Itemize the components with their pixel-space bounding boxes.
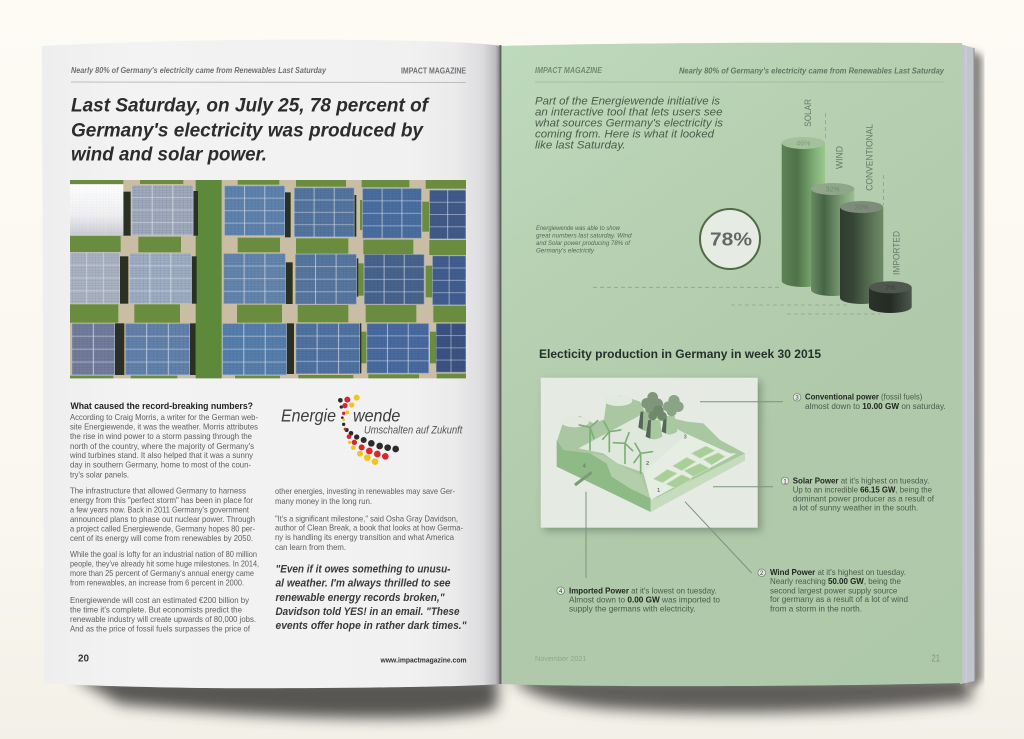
- callout 4: imported power: supply the germans with electricity.: [569, 604, 696, 614]
- illustration numbers: 4: [583, 464, 587, 470]
- gutter shading: [500, 45, 502, 684]
- article column two: author of Clean Break, a book that looks at how Germa-: [275, 523, 463, 533]
- article column two: many money in the long run.: [275, 496, 372, 506]
- left headline: Germany's electricity was produced by: [71, 120, 424, 142]
- solar farm photo: [70, 180, 466, 378]
- small caption: [536, 225, 632, 254]
- article column two: can learn from them.: [275, 542, 346, 552]
- bar: conventional 20%: 20%: [855, 204, 869, 212]
- paragraph 2: energy from this "perfect storm" has been in place for: [70, 495, 253, 505]
- page block edge: [960, 44, 975, 684]
- pull quote: [276, 564, 467, 632]
- paragraph 3: from renewables, an increase from 6 percent in 2000.: [70, 578, 244, 588]
- paragraph 1: day in southern Germany, home to most of the coun-: [70, 460, 251, 470]
- chart vertical labels: IMPORTED: [892, 231, 902, 275]
- paragraph 1: north of the country, where the majority of Germany's: [70, 441, 254, 451]
- paragraph 1: According to Craig Morris, a writer for the German web-: [70, 412, 258, 422]
- illustration card: [541, 378, 758, 528]
- marker 2: 2: [760, 571, 764, 577]
- callout 3: conventional power: Conventional power (fossil fuels): [805, 391, 922, 401]
- right running header: IMPACT MAGAZINE: [535, 66, 603, 75]
- left headline: Last Saturday, on July 25, 78 percent of: [71, 94, 430, 116]
- pull quote: renewable energy records broken,": [276, 592, 445, 604]
- pull quote: "Even if it owes something to unusu-: [276, 564, 451, 576]
- bar: imported 2%: 2%: [885, 285, 895, 292]
- website: www.impactmagazine.com: [380, 656, 467, 664]
- paragraph 1: site Energiewende, it was the weather. Morris attributes: [70, 422, 258, 432]
- paragraph 4: Energiewende will cost an estimated €200 billion by: [70, 595, 250, 605]
- bar: wind 32%: [811, 183, 854, 296]
- paragraph 2: a project called Energiewende, Germany hopes 80 per-: [70, 524, 255, 534]
- left headline: [71, 94, 430, 166]
- pull quote: Davidson told YES! in an email. "These: [276, 606, 460, 618]
- illustration card shadow: [544, 381, 761, 531]
- callout 3: conventional power: [793, 391, 946, 411]
- callout 2: wind power: Wind Power at it's highest on tuesday.: [770, 567, 906, 577]
- paragraph 4: [70, 595, 256, 634]
- logo wordmark: Energie: [281, 406, 336, 426]
- callout 2: wind power: second largest power supply source: [770, 585, 898, 595]
- marker 3: [793, 394, 801, 402]
- page number 20: 20: [78, 654, 89, 664]
- callout 4: imported power: Almost down to 0.00 GW was imported to: [569, 594, 720, 604]
- article column two: other energies, investing in renewables may save Ger-: [275, 486, 455, 496]
- right running header: [535, 66, 945, 82]
- paragraph 3: [70, 549, 259, 588]
- logo wordmark: wende: [353, 406, 400, 426]
- hills and land: [557, 395, 745, 512]
- footer date: November 2021: [535, 654, 586, 663]
- paragraph 2: [70, 486, 255, 543]
- small caption: and Solar power producing 78% of: [536, 240, 631, 247]
- bar: solar 46%: [782, 137, 825, 287]
- callout 1: solar power: [781, 475, 935, 513]
- page number 21: 21: [932, 654, 940, 664]
- paragraph 1: try's solar panels.: [70, 470, 129, 480]
- 78% badge: 78%: [710, 229, 752, 250]
- callout 1: solar power: Up to an incredible 66.15 GW, being the: [793, 484, 932, 494]
- illustration numbers: 3: [684, 434, 687, 440]
- marker 4: 4: [559, 589, 563, 595]
- cylinder chart: [782, 137, 912, 313]
- paragraph 3: While the goal is lofty for an industrial nation of 80 million: [70, 549, 257, 559]
- pull quote: events offer hope in rather dark times.": [276, 620, 467, 632]
- left running header: [71, 66, 467, 82]
- paragraph 2: a few years now. Back in 2011 Germany's government: [70, 504, 250, 514]
- callout 2: wind power: [758, 567, 908, 614]
- callout 2: wind power: from a storm in the north.: [770, 604, 862, 614]
- paragraph 2: The infrastructure that allowed Germany to harness: [70, 486, 246, 496]
- article column one: [69, 401, 259, 634]
- bar: wind 32%: 32%: [826, 186, 840, 194]
- paragraph 1: [69, 412, 258, 480]
- bar: imported 2%: [869, 281, 912, 313]
- callout 4: imported power: Imported Power at it's lowest on tuesday.: [569, 585, 717, 595]
- right running header: Nearly 80% of Germany's electricity came from Renewables Last Saturday: [679, 66, 945, 76]
- intro paragraph: coming from. Here is what it looked: [535, 128, 715, 140]
- left headline: wind and solar power.: [71, 144, 267, 166]
- small caption: great numbers last saturday. Wind: [536, 232, 632, 239]
- callout 1: solar power: dominant power producer as a result of: [793, 494, 935, 504]
- paragraph 3: more than 25 percent of Germany's annual energy came: [70, 568, 254, 578]
- panel: left page: [42, 40, 501, 688]
- chart vertical labels: [803, 99, 902, 275]
- bar: solar 46%: 46%: [796, 140, 810, 148]
- callout 1: solar power: a lot of sunny weather in the south.: [793, 503, 918, 513]
- marker 3: 3: [795, 396, 799, 402]
- left page sheet: [42, 40, 501, 688]
- callout 4: imported power: [557, 585, 720, 614]
- paragraph 4: the time it's complete. But economists predict the: [70, 604, 242, 614]
- callout 2: wind power: Nearly reaching 50.00 GW, being the: [770, 576, 901, 586]
- section heading: Electicity production in Germany in week 30 2015: [539, 347, 821, 361]
- wind turbines: [579, 421, 652, 473]
- callout 3: conventional power: almost down to 10.00 GW on saturday.: [805, 401, 946, 411]
- paragraph 2: cent of its energy will come from renewables by 2050.: [70, 533, 253, 543]
- illustration numbers: 1: [657, 488, 660, 494]
- dashed guide lines: [593, 113, 884, 314]
- panel: right page: [500, 43, 962, 686]
- chart vertical labels: CONVENTIONAL: [864, 124, 874, 191]
- bar: conventional 20%: [840, 201, 883, 304]
- article column two: [275, 486, 463, 552]
- chart vertical labels: SOLAR: [803, 99, 813, 127]
- illustration numbers: [583, 434, 687, 494]
- small caption: Germany's electricity: [536, 247, 595, 254]
- pull quote: al weather. I'm always thrilled to see: [276, 578, 450, 590]
- cooling towers and smoke: [638, 392, 684, 439]
- marker 1: [781, 477, 789, 485]
- 78% badge: [700, 209, 760, 269]
- Energiewende logo: [281, 395, 463, 465]
- leader lines: [586, 402, 783, 578]
- paragraph 1: the rise in wind power to a storm passing through the: [70, 431, 252, 441]
- illustration numbers: 2: [646, 461, 649, 467]
- marker 4: [557, 587, 564, 595]
- article column two: ny is handling its energy transition and what America: [275, 532, 454, 542]
- intro paragraph: what sources Germany's electricity is: [535, 117, 724, 129]
- chart vertical labels: WIND: [834, 146, 844, 169]
- logo wordmark: Umschalten auf Zukunft: [364, 424, 463, 436]
- paragraph 4: renewable industry will create upwards of 80,000 jobs.: [70, 614, 256, 624]
- intro paragraph: [535, 95, 724, 151]
- paragraph 2: announced plans to phase out nuclear power. Through: [70, 514, 255, 524]
- right page sheet: [501, 43, 962, 686]
- import pipe: [575, 472, 592, 485]
- isometric energy landscape: [557, 392, 745, 512]
- marker 1: 1: [783, 479, 787, 485]
- intro paragraph: an interactive tool that lets users see: [535, 106, 722, 118]
- logo dots: [338, 395, 399, 465]
- callout 2: wind power: for germany as a result of a lot of wind: [770, 594, 908, 604]
- left running header: Nearly 80% of Germany's electricity came from Renewables Last Saturday: [71, 66, 326, 75]
- left running header: IMPACT MAGAZINE: [401, 66, 467, 76]
- small caption: Energiewende was able to show: [536, 225, 620, 232]
- paragraph 1: wind turbines stand. It also helped that it was a sunny: [69, 450, 254, 460]
- intro paragraph: Part of the Energiewende initiative is: [535, 95, 721, 107]
- solar panels: [653, 446, 725, 488]
- intro paragraph: like last Saturday.: [535, 139, 626, 151]
- callout 1: solar power: Solar Power at it's highest on tuesday.: [793, 475, 929, 485]
- article column two: "It's a significant milestone," said Osha Gray Davidson,: [275, 514, 458, 524]
- paragraph 4: And as the price of fossil fuels surpasses the price of: [70, 624, 251, 634]
- logo wordmark: [281, 406, 463, 436]
- marker 2: [758, 569, 766, 577]
- article subheading: What caused the record-breaking numbers?: [70, 401, 253, 412]
- paragraph 3: people, they've already hit some huge milestones. In 2014,: [70, 558, 259, 568]
